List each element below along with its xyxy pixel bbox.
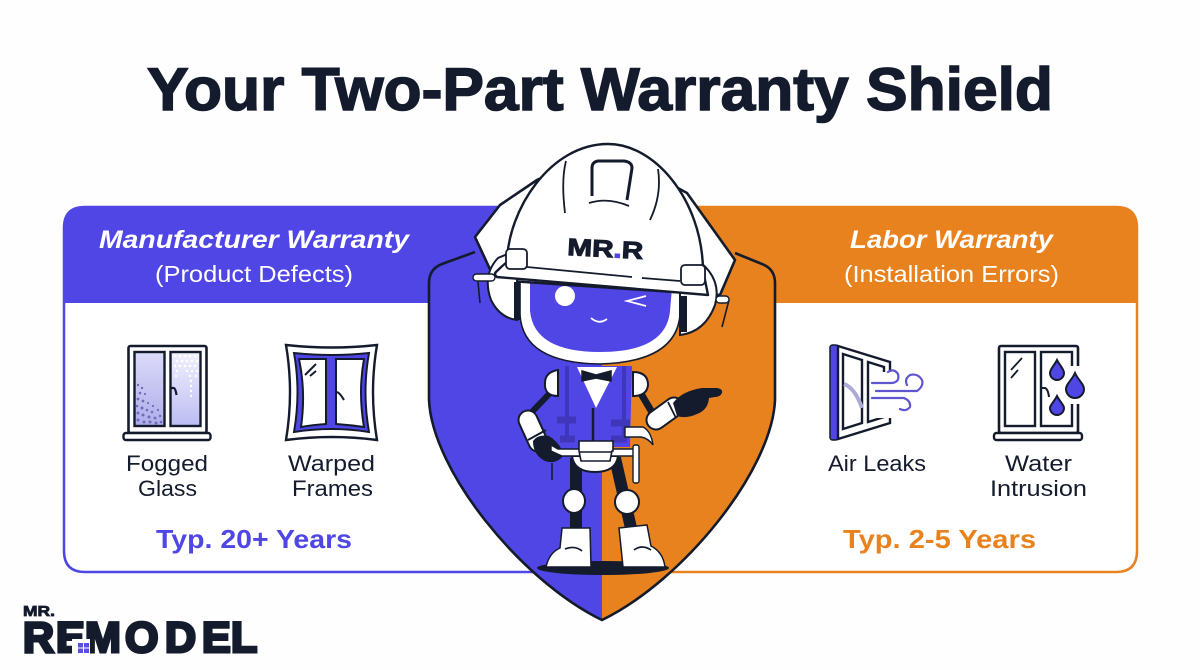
head: face screen (520, 276, 680, 364)
eye: open (555, 286, 575, 306)
hat clips (506, 249, 527, 269)
hat ridges (563, 161, 659, 220)
logo word: mr: MR. (23, 603, 55, 620)
label: warped frames (288, 451, 375, 501)
icon: air leaks window (830, 345, 922, 440)
tool belt with pouch (551, 441, 637, 472)
label: water intrusion: Water (1005, 451, 1072, 476)
flap lower edges (478, 282, 729, 327)
duration: typ 2-5 years: Typ. 2-5 Years (843, 524, 1036, 554)
label: fogged glass: Fogged (126, 451, 208, 476)
logo window mark (72, 639, 90, 656)
arm: left, hand on hip (528, 370, 564, 480)
mascot: robot with hard hat (473, 144, 735, 575)
icon: warped frames window (286, 345, 377, 440)
title: Your Two-Part Warranty Shield (147, 56, 1053, 123)
panel header: manufacturer (63, 206, 540, 303)
ear muff: right (680, 262, 729, 335)
hat logo text: MR .R (567, 234, 644, 265)
label: water intrusion: Intrusion (990, 476, 1087, 501)
hat rear flaps (475, 150, 735, 295)
label: air leaks: Air Leaks (828, 451, 926, 476)
ear muff: left (473, 250, 520, 320)
subheading: installation errors: (Installation Errors) (844, 261, 1059, 287)
heading: labor warranty: Labor Warranty (850, 226, 1054, 254)
hammer (625, 427, 653, 483)
boots (546, 525, 665, 567)
legs (563, 458, 639, 530)
arm: right, pointing (633, 372, 722, 420)
smile (591, 318, 607, 322)
label: water intrusion (990, 451, 1087, 501)
icon: water intrusion window (994, 346, 1086, 440)
icon: fogged glass window (124, 346, 210, 440)
hat dome and brim (495, 144, 708, 295)
vest (557, 366, 632, 447)
brim upper edge (527, 267, 680, 281)
subheading: product defects: (Product Defects) (155, 261, 353, 287)
heading: manufacturer warranty: Manufacturer Warranty (99, 226, 410, 254)
panel header: labor (660, 206, 1138, 303)
shield (429, 252, 775, 620)
duration: typ 20+ years: Typ. 20+ Years (156, 524, 352, 554)
panel: labor warranty (660, 206, 1138, 572)
panel: manufacturer warranty (63, 206, 540, 572)
label: warped frames: Warped (288, 451, 375, 476)
hard hat (473, 144, 735, 335)
label: fogged glass (126, 451, 208, 501)
ground shadow (537, 561, 669, 575)
eye: winking (627, 296, 646, 306)
logo: mr remodel (23, 603, 257, 662)
logo word: remodel: REMODEL (23, 614, 257, 662)
label: fogged glass: Glass (138, 476, 197, 501)
label: warped frames: Frames (292, 476, 373, 501)
